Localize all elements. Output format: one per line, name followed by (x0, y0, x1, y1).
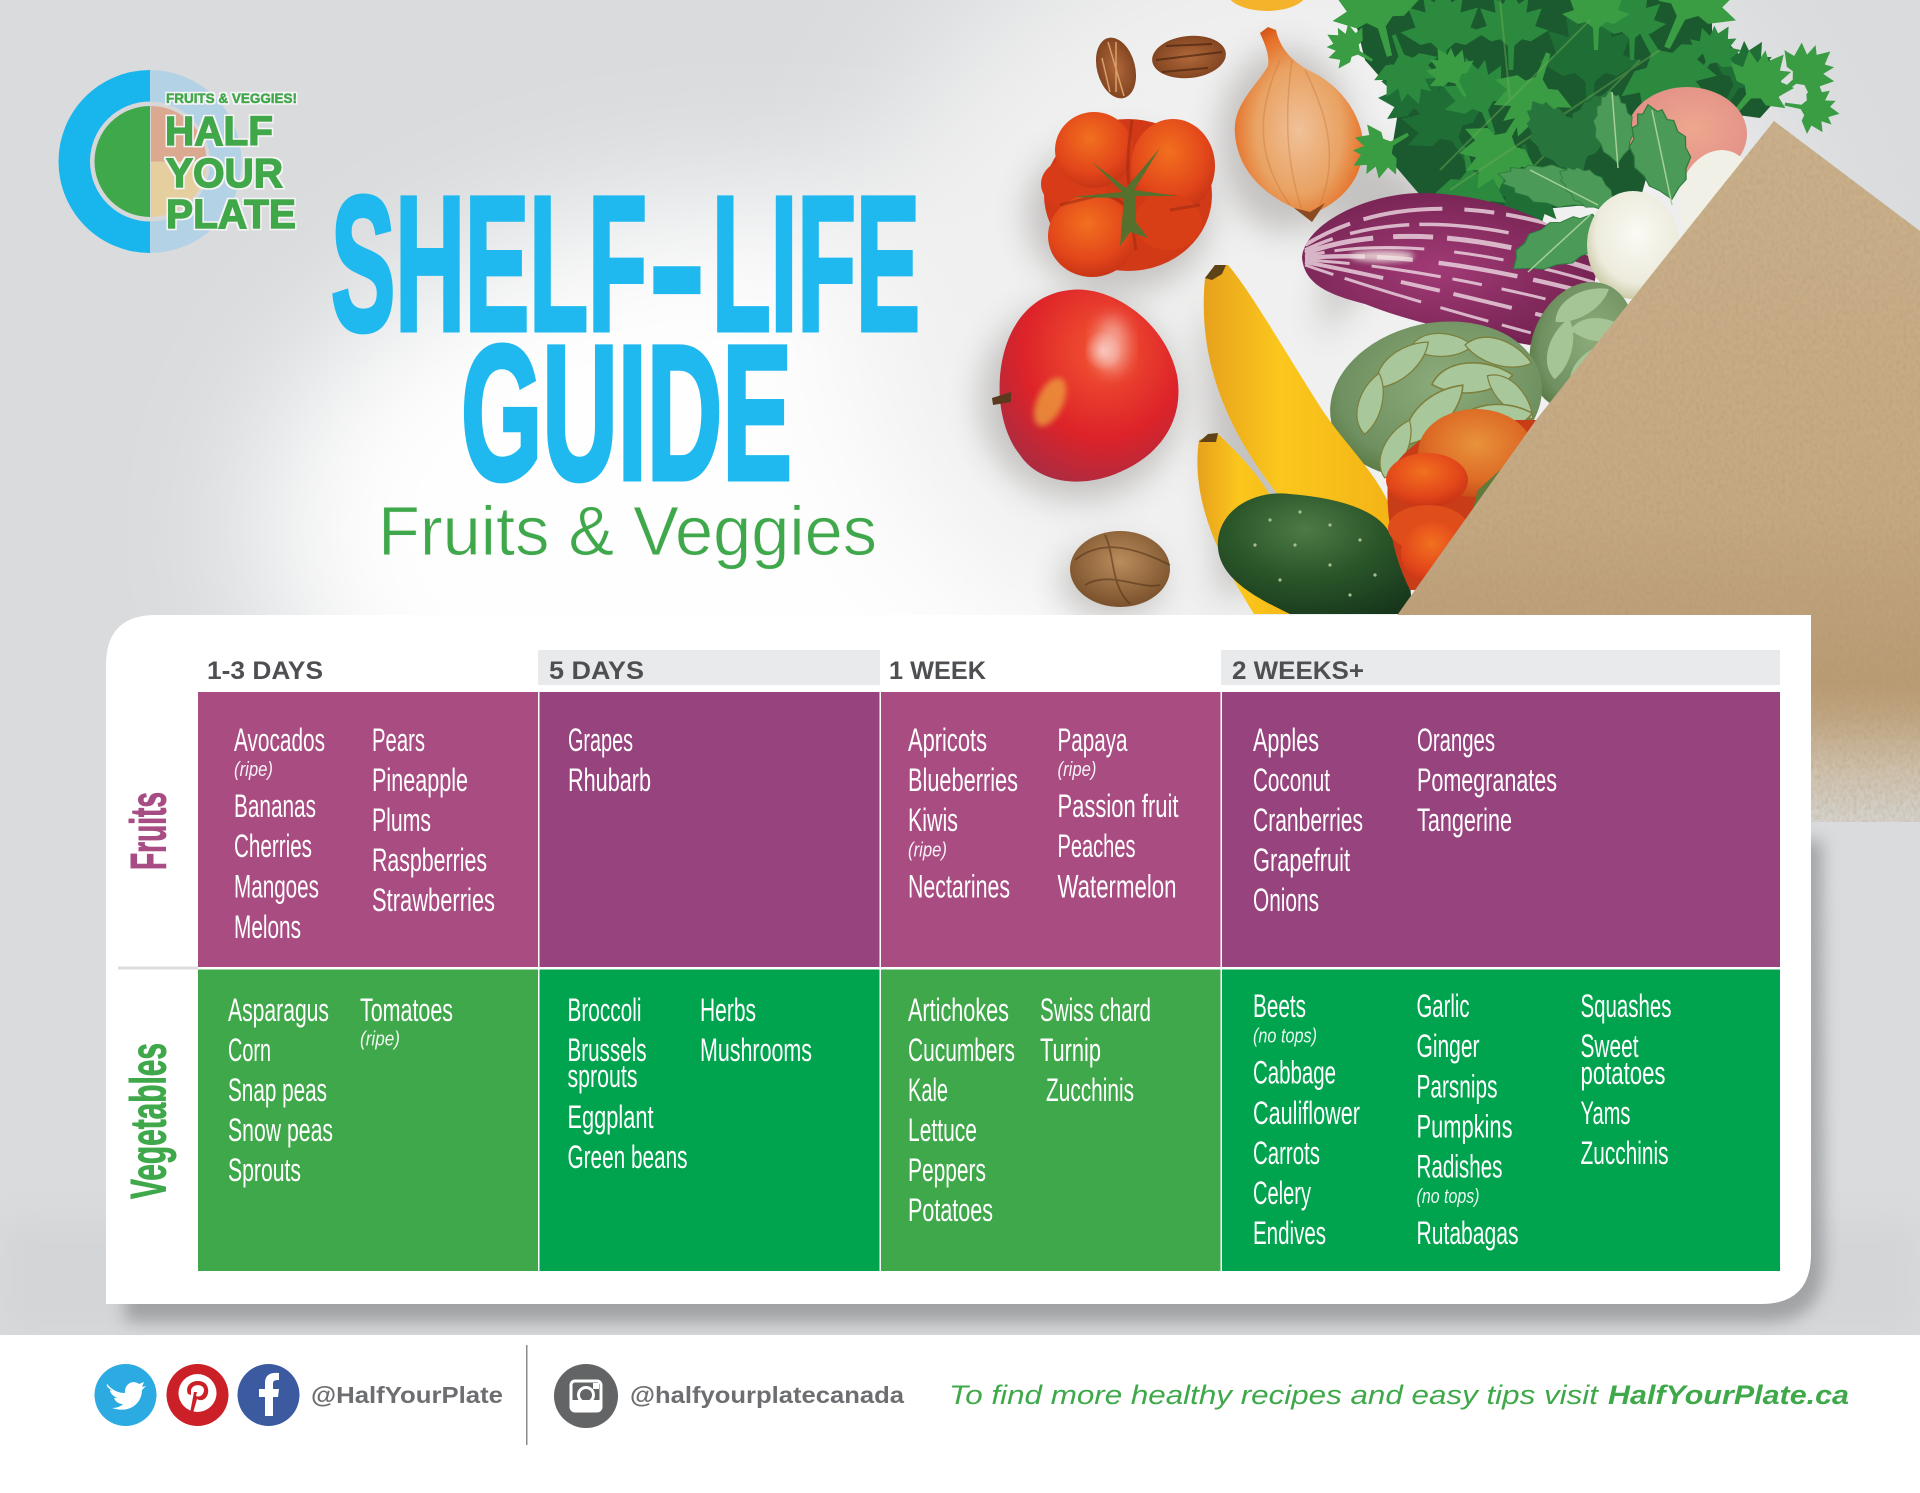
icon: pinterest (166, 1364, 228, 1426)
table cell: fruits 1 week: Watermelon (1058, 868, 1176, 904)
table cell: fruits 1 week: Passion fruit (1058, 788, 1179, 824)
table cell: fruits 1 week: Peaches (1058, 828, 1136, 864)
table cell: vegetables 5 days: Mushrooms (700, 1032, 812, 1068)
red potato (1627, 87, 1747, 181)
table cell: fruits 2 weeks+: Grapefruit (1253, 842, 1350, 878)
column headers: 5 DAYS (549, 657, 644, 685)
row label: Vegetables: Vegetables (120, 1043, 176, 1199)
table cell: fruits 1-3 days: Pears (372, 722, 425, 758)
table cell: vegetables 1-3 days (198, 970, 538, 1271)
table cell: vegetables 2 weeks+: Cabbage (1253, 1054, 1336, 1090)
table cell: vegetables 2 weeks+: Ginger (1416, 1028, 1480, 1064)
table cell: fruits 1-3 days: Bananas (234, 788, 316, 824)
pecans (1090, 32, 1228, 103)
row label: Fruits: Fruits (120, 792, 176, 870)
second tomato (1386, 409, 1540, 590)
small banana (1197, 433, 1303, 614)
logo wordmark (165, 90, 297, 237)
table cell: vegetables 1 week: Zucchinis (1046, 1072, 1134, 1108)
footer (0, 1335, 1920, 1493)
heirloom tomato (1041, 112, 1215, 277)
table cell: vegetables 5 days: Herbs (700, 992, 756, 1028)
table cell: vegetables 2 weeks+: Yams (1580, 1095, 1630, 1131)
table cell: vegetables 1-3 days: Snow peas (228, 1112, 333, 1148)
table cell: vegetables 2 weeks+: Rutabagas (1416, 1215, 1518, 1251)
table cell: fruits 2 weeks+: Apples (1253, 722, 1319, 758)
table cell: fruits 2 weeks+ (1222, 692, 1780, 967)
cucumber (1218, 493, 1411, 614)
table cell: vegetables 2 weeks+: Zucchinis (1580, 1135, 1668, 1171)
title: LIFE (712, 156, 920, 371)
table cell: vegetables 2 weeks+: Radishes (1416, 1148, 1502, 1184)
table cell: vegetables 2 weeks+ (1222, 970, 1780, 1271)
table cell: fruits 1-3 days: Avocados (234, 722, 325, 758)
table cell: fruits 2 weeks+: Cranberries (1253, 802, 1363, 838)
table cell: fruits 1 week: Kiwis (908, 802, 958, 838)
card shadow (0, 840, 1920, 1336)
table cell: fruits 1-3 days (198, 692, 538, 967)
table cell: vegetables 1-3 days: Sprouts (228, 1152, 301, 1188)
contact shadows (980, 48, 1440, 618)
table cell: vegetables 2 weeks+: Squashes (1580, 988, 1672, 1024)
table cell: fruits 1-3 days: Plums (372, 802, 431, 838)
red apple (992, 290, 1178, 482)
table cell: vegetables 1 week: Swiss chard (1040, 992, 1151, 1028)
table cell: vegetables 2 weeks+: Carrots (1253, 1135, 1320, 1171)
row divider (118, 966, 198, 970)
column headers: 1-3 DAYS (207, 657, 323, 685)
icon: twitter (94, 1364, 156, 1426)
table cell: fruits 1 week: (ripe) (908, 840, 947, 862)
table cell: fruits 1 week (881, 692, 1220, 967)
table cell: fruits 1-3 days: Cherries (234, 828, 312, 864)
table cell: fruits 1 week: Apricots (908, 722, 987, 758)
table cell: fruits 1-3 days: Pineapple (372, 762, 468, 798)
orange at top (1227, 0, 1307, 11)
onion (1235, 27, 1363, 222)
table cell: fruits 1-3 days: (ripe) (234, 759, 273, 781)
title: - (649, 156, 705, 371)
table cell: fruits 2 weeks+: Onions (1253, 882, 1319, 918)
table cell: vegetables 2 weeks+: Pumpkins (1416, 1108, 1512, 1144)
icon: instagram (554, 1364, 618, 1428)
mint leaves (1489, 86, 1700, 283)
column headers (207, 650, 1780, 685)
table cell: vegetables 1 week: Artichokes (908, 992, 1009, 1028)
large banana (1204, 265, 1392, 530)
table cell: vegetables 2 weeks+: Celery (1253, 1175, 1311, 1211)
paper bag (1398, 121, 1920, 822)
logo wordmark: YOUR (166, 150, 283, 196)
table cell: vegetables 2 weeks+: Beets (1253, 988, 1306, 1024)
white turnip front (1587, 191, 1679, 299)
vertical divider (526, 1345, 528, 1445)
table cell: vegetables 5 days: sprouts (568, 1058, 638, 1094)
shelf-life table (118, 650, 1780, 1271)
title: SHELF (331, 156, 647, 371)
table cell: fruits 1-3 days: Strawberries (372, 882, 495, 918)
table cell: fruits 2 weeks+: Oranges (1417, 722, 1495, 758)
table cell: fruits 1-3 days: Melons (234, 909, 301, 945)
table cell: vegetables 2 weeks+: Cauliflower (1253, 1095, 1360, 1131)
table cell: vegetables 2 weeks+: Garlic (1416, 988, 1470, 1024)
table cell: vegetables 2 weeks+: (no tops) (1253, 1026, 1317, 1048)
table cell: vegetables 5 days: Eggplant (568, 1099, 654, 1135)
table cell: vegetables 2 weeks+: Parsnips (1416, 1068, 1498, 1104)
walnut (1070, 531, 1170, 607)
subtitle: Fruits & Veggies (378, 492, 877, 570)
table cell: vegetables 2 weeks+: Endives (1253, 1215, 1326, 1251)
table cell: fruits 1 week: (ripe) (1058, 759, 1096, 781)
column headers: 1 WEEK (889, 657, 986, 685)
table cell: fruits 1 week: Papaya (1058, 722, 1128, 758)
table cell: fruits 1-3 days: Raspberries (372, 842, 487, 878)
white turnip rear (1666, 139, 1766, 251)
column headers: 2 WEEKS+ (1232, 657, 1364, 685)
table cell: fruits 1-3 days: Mangoes (234, 868, 319, 904)
table cell: vegetables 1 week: Peppers (908, 1152, 986, 1188)
table cell: vegetables 1 week: Cucumbers (908, 1032, 1015, 1068)
small artichoke (1511, 266, 1653, 426)
title (331, 156, 920, 520)
table cell: vegetables 2 weeks+: (no tops) (1416, 1186, 1480, 1208)
logo wordmark: PLATE (166, 191, 296, 237)
tagline (949, 1380, 1849, 1410)
table cell: vegetables 1-3 days: Asparagus (228, 992, 329, 1028)
table cell: vegetables 5 days: Green beans (568, 1139, 688, 1175)
table cell: fruits 2 weeks+: Coconut (1253, 762, 1330, 798)
table cell: fruits 2 weeks+: Pomegranates (1417, 762, 1557, 798)
parsley bunch (1315, 0, 1850, 239)
large artichoke (1315, 302, 1557, 498)
handle: halfyourplatecanada: @halfyourplatecanada (630, 1382, 904, 1408)
table cell: vegetables 5 days: Brussels (568, 1032, 646, 1068)
table cell: fruits 5 days: Grapes (568, 722, 633, 758)
table cell: vegetables 1 week: Lettuce (908, 1112, 977, 1148)
table cell: vegetables 1-3 days: Corn (228, 1032, 271, 1068)
tagline: To find more healthy recipes and easy tips visit (949, 1380, 1600, 1410)
table cell: fruits 1 week: Nectarines (908, 868, 1010, 904)
tagline: HalfYourPlate.ca (1608, 1380, 1849, 1410)
table cell: vegetables 1-3 days: Snap peas (228, 1072, 327, 1108)
table cell: vegetables 2 weeks+: Sweet (1580, 1028, 1639, 1064)
logo wordmark: HALF (165, 108, 273, 154)
icon: facebook (238, 1364, 300, 1426)
photo: groceries and paper bag (980, 0, 1920, 822)
white table card (106, 615, 1811, 1304)
title: GUIDE (461, 305, 792, 520)
table cell: vegetables 1-3 days: Tomatoes (360, 992, 453, 1028)
table cell: vegetables 5 days: Broccoli (568, 992, 642, 1028)
table cell: fruits 5 days (540, 692, 880, 967)
table cell: fruits 2 weeks+: Tangerine (1417, 802, 1512, 838)
table cell: fruits 1 week: Blueberries (908, 762, 1018, 798)
table cell: vegetables 1-3 days: (ripe) (360, 1028, 400, 1050)
logo: Half Your Plate (58, 70, 297, 253)
logo plate (58, 70, 241, 253)
table cell: vegetables 1 week: Kale (908, 1072, 948, 1108)
logo wordmark: FRUITS & VEGGIES! (166, 90, 297, 106)
striped eggplant (1302, 193, 1600, 345)
table cell: vegetables 2 weeks+: potatoes (1580, 1055, 1666, 1091)
table cell: vegetables 1 week (881, 970, 1220, 1271)
table cell: vegetables 1 week: Potatoes (908, 1192, 993, 1228)
handle: HalfYourPlate: @HalfYourPlate (311, 1382, 503, 1408)
table cell: vegetables 5 days (540, 970, 880, 1271)
table cell: fruits 5 days: Rhubarb (568, 762, 651, 798)
table cell: vegetables 1 week: Turnip (1040, 1032, 1101, 1068)
